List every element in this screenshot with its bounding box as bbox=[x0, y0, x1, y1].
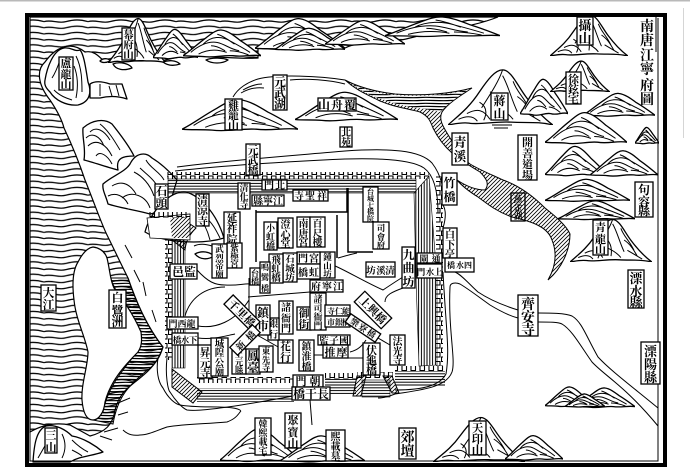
Fuzhou mountain bbox=[295, 92, 398, 121]
label: Baichi lou: 百尺樓 bbox=[312, 217, 324, 249]
label: small bridge: 台橋 bbox=[251, 268, 260, 286]
shore ticks bbox=[100, 245, 156, 440]
label: Chenghuang gong miao bbox=[211, 338, 228, 378]
label: Feihong qiao: 飛虹橋 bbox=[271, 255, 281, 284]
label: Qinglong shan: 青龍山 bbox=[595, 220, 606, 256]
Tianyin mountain bbox=[433, 418, 563, 462]
title line bbox=[655, 17, 657, 52]
label: Jurong xian: 句容縣 bbox=[638, 182, 651, 218]
label: Zhongshan fang bbox=[320, 252, 335, 279]
label: Jiangning fu: 府寧江 bbox=[311, 280, 343, 293]
label: Shicheng fang bbox=[283, 253, 297, 284]
label: Jilong shan bbox=[225, 98, 242, 132]
hill: Xuanwu lake shore bbox=[233, 76, 345, 97]
label: Zhu yamen bbox=[279, 301, 293, 335]
label: Shicheng fang: 石城坊 bbox=[285, 254, 295, 284]
label: Shangyuan xian bbox=[232, 349, 246, 375]
label: Qi'an si: 齊安寺 bbox=[521, 296, 535, 339]
label: Tianyin shan bbox=[469, 421, 486, 457]
label: Qinglong shan bbox=[593, 220, 608, 256]
label: Fugui qiao bbox=[363, 343, 380, 377]
label: Yanzuo yuan bbox=[224, 211, 240, 246]
title: 南唐江寧府圖 bbox=[640, 18, 654, 108]
Mufu mountain range bbox=[100, 19, 261, 70]
label: Lulong shan: 盧龍山 bbox=[60, 56, 72, 91]
label: palace gate: 門宮 bbox=[298, 253, 319, 265]
label: west gate: 門西龍 bbox=[168, 318, 196, 329]
label: Chengxin tang bbox=[278, 218, 293, 250]
label: Qing xi: 青溪 bbox=[453, 135, 467, 164]
label: Qi'an si bbox=[518, 295, 538, 339]
southwest corner bbox=[172, 369, 202, 403]
label: Han Xizai zhai bbox=[255, 418, 271, 456]
label: Mufu shan: 幕府山 bbox=[123, 28, 134, 61]
eastern mountain stack bbox=[545, 93, 659, 220]
label: Bailu zhou bbox=[109, 290, 126, 329]
label: Tianyin shan: 天印山 bbox=[472, 422, 484, 457]
label: bridge box: 橋水四 bbox=[447, 260, 472, 270]
label: Baixia ting: 白下亭 bbox=[445, 228, 456, 260]
label: Jiangning xian: 縣寧江 bbox=[253, 194, 283, 208]
label: Xiashui qiao: 橋水下 bbox=[173, 335, 198, 345]
label: Kaishan daochang: 開善道場 bbox=[522, 136, 533, 182]
label: Bailu zhou: 白鷺洲 bbox=[111, 290, 124, 329]
label: Jiao tan: 郊壇 bbox=[400, 430, 414, 460]
label: bridge box bbox=[445, 258, 474, 272]
label: Shitou: 石頭 bbox=[155, 184, 168, 210]
label: Yu jie: 御街 bbox=[298, 306, 310, 331]
lake and Qingxi stream bbox=[345, 80, 570, 280]
label: market: 市銀橋 bbox=[327, 317, 350, 327]
label: Fugui qiao: 伏龜橋 bbox=[366, 343, 377, 377]
label: Nantang gong: 南唐宮 bbox=[298, 217, 308, 249]
label: Liyang xian bbox=[641, 342, 660, 385]
label: Liyang xian: 溧陽縣 bbox=[644, 344, 658, 385]
label: Wulie di miao: 武烈帝廟 bbox=[215, 244, 224, 279]
coastal hills bbox=[83, 121, 224, 259]
label: Yanque hu: 燕雀湖 bbox=[514, 194, 523, 221]
label: Baichi lou bbox=[310, 217, 325, 249]
label: Chao men: 門朝 bbox=[296, 374, 320, 388]
label: Xiaohong qiao bbox=[264, 222, 277, 251]
label: Guozi jian: 監子國 bbox=[319, 335, 349, 347]
label: Xizai mu bbox=[326, 430, 345, 463]
label: Tong zha: 閘通 bbox=[419, 253, 441, 264]
island: Bailu Zhou bbox=[73, 247, 142, 420]
Xu Xuan residence hill bbox=[550, 61, 610, 92]
label: Qingxi fang bbox=[366, 262, 395, 277]
label: Sihui fu: 司會府 bbox=[377, 223, 386, 250]
label: Zhen shi: 鎮市 bbox=[257, 305, 271, 333]
label: Zhu yamen: 諸衙門 bbox=[281, 301, 291, 335]
Jiang mountain bbox=[448, 70, 568, 128]
label: diagonal bridge south: 新橋 bbox=[233, 328, 257, 352]
label: Jurong xian bbox=[635, 182, 653, 218]
label: Jiang shan bbox=[491, 93, 508, 121]
Sanshan mountain bbox=[33, 426, 103, 462]
label: diagonal bridge east: 上興橋 bbox=[356, 293, 390, 327]
label: Shangyuan xian: 上元縣 bbox=[235, 349, 245, 375]
label: Feng tai: 鳳臺 bbox=[247, 348, 259, 375]
label: She shan: 攝山 bbox=[578, 18, 592, 46]
Jilong mountain bbox=[182, 100, 298, 131]
label: diagonal long bridge: 樂寮橋 bbox=[348, 316, 378, 340]
label: diagonal bridge west: 千里橋 bbox=[226, 297, 258, 330]
label: Shangshui men: 門水上 bbox=[417, 267, 443, 277]
palace walls bbox=[256, 188, 373, 262]
label: Zhongshan fang: 鍾山坊 bbox=[323, 252, 332, 279]
label: Hua hang: 花行 bbox=[280, 339, 291, 364]
north road line bbox=[310, 205, 445, 425]
west bastion bbox=[147, 212, 190, 240]
label: Chengxin tang: 澄心堂 bbox=[280, 218, 292, 250]
She mountain bbox=[550, 15, 628, 56]
east wall bbox=[414, 176, 443, 366]
Lulong mountain bbox=[45, 48, 127, 105]
hatching: lake edge bbox=[241, 79, 345, 93]
label: Changgan qiao: 橋干長 bbox=[293, 386, 329, 401]
south wall bbox=[197, 366, 445, 402]
label: Qingliang si: 清涼寺 bbox=[197, 193, 209, 228]
label: Yanzuo yuan: 延祚院 bbox=[226, 211, 238, 246]
label: Ziji gong bbox=[227, 243, 242, 269]
scan edge marks bbox=[0, 0, 690, 138]
label: Qinghua si: 清化寺 bbox=[239, 182, 249, 210]
label: Jubao shan bbox=[285, 413, 301, 450]
city wall bbox=[147, 172, 445, 403]
label: Taicheng Qiqiao yuan: 台城七橋院 bbox=[367, 187, 375, 223]
dense channel beside the island bbox=[93, 278, 163, 424]
label: Xu Xuan zhai: 徐鉉宅 bbox=[568, 72, 580, 106]
label: San shan: 三山 bbox=[46, 429, 56, 454]
label: Fuzhou shan: 山舟覆 bbox=[318, 97, 356, 112]
west wall bbox=[165, 224, 196, 368]
label: Xuanwu qiao: 元武橋 bbox=[248, 144, 258, 177]
label: Xiaohong qiao: 小虹橋 bbox=[266, 223, 276, 251]
label: Chenghuang gong miao: 城隍公廟 bbox=[215, 338, 225, 378]
label: Xiangsheng si: 寺聖祥 bbox=[294, 190, 327, 202]
label: Zhusi yamen: 諸司衙門 bbox=[313, 293, 323, 331]
label: Jiang shan: 蔣山 bbox=[493, 93, 506, 121]
label: Baixia ting bbox=[443, 228, 457, 260]
label: Taicheng Qiqiao yuan bbox=[363, 187, 378, 223]
label: Bei yuan: 北苑 bbox=[341, 126, 351, 149]
river: Da Jiang water bbox=[30, 17, 498, 436]
moat lines bbox=[123, 150, 658, 435]
label: Tui mo: 推摩 bbox=[324, 345, 348, 359]
canals bbox=[185, 253, 403, 358]
label: north gate: 門北 bbox=[264, 179, 285, 192]
label: Xu Xuan zhai bbox=[566, 72, 581, 106]
label: Zhusi yamen bbox=[310, 293, 326, 331]
label: Da jiang: 大江 bbox=[42, 285, 55, 312]
label: Hua hang bbox=[278, 339, 293, 364]
label: Lishui xian: 溧水縣 bbox=[629, 271, 643, 310]
label: Yanque hu bbox=[511, 193, 525, 221]
label: Hong qiao bbox=[297, 264, 320, 279]
label: Kaishan daochang bbox=[518, 135, 537, 182]
label: temple: 寺仁能 bbox=[327, 306, 350, 316]
label: Jiuqu fang: 九曲坊 bbox=[402, 247, 415, 289]
label: Xizai mu: 熙載墓 bbox=[330, 430, 342, 463]
label: Faguang si bbox=[390, 335, 405, 367]
label: Dongxian si bbox=[259, 346, 273, 373]
label: Jubao shan: 聚寶山 bbox=[288, 413, 300, 450]
north wall bbox=[167, 172, 429, 193]
label: Jilong shan: 雞籠山 bbox=[228, 98, 239, 132]
label: Zhu qiao: 竹橋 bbox=[443, 175, 456, 204]
label: Zhenhuai qiao: 鎮淮橋 bbox=[302, 340, 312, 373]
label: Han Xizai zhai: 韓熙載宅 bbox=[258, 418, 268, 456]
label: Sihui fu bbox=[373, 222, 389, 250]
top ridge mountains bbox=[255, 17, 500, 50]
Jubao mountains bbox=[220, 429, 365, 462]
label: diagonal bridge south bbox=[230, 325, 261, 356]
label: Hong qiao: 橋虹 bbox=[298, 266, 319, 279]
south gate bastions bbox=[353, 372, 399, 397]
label: Wulie di miao bbox=[212, 244, 227, 279]
Qinglong mountain bbox=[570, 219, 652, 262]
rock cluster bbox=[545, 387, 635, 408]
label: west gate box: 邑監 bbox=[172, 264, 196, 279]
label: Zhenhuai qiao bbox=[299, 340, 314, 373]
label: Feihong qiao bbox=[269, 254, 283, 284]
label: Faguang si: 法光寺 bbox=[392, 335, 404, 367]
label: Yin hang: 銀行 bbox=[269, 318, 279, 341]
label: Xuanwu hu: 元武湖 bbox=[274, 75, 286, 111]
label: Mingluan qiao: 鳴鸞橋 bbox=[260, 262, 270, 293]
label: Qingxi fang: 坊溪清 bbox=[366, 265, 395, 277]
label: Ziji gong: 紫極宮 bbox=[230, 243, 239, 269]
label: Dongxian si: 東先寺 bbox=[262, 346, 271, 373]
label: Shengyuan si: 昇元寺 bbox=[200, 345, 210, 380]
